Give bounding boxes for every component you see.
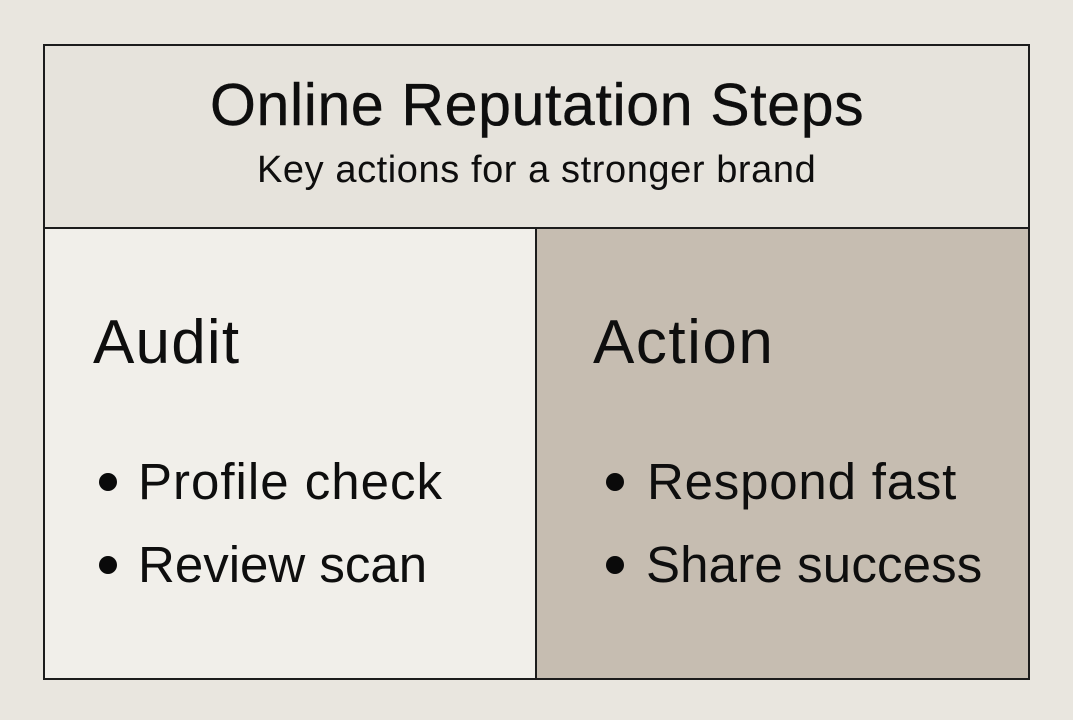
bullet: review scan: Review scan [138,536,427,593]
heading: action: Action [593,308,774,377]
panel: action [536,229,1030,680]
title: Online Reputation Steps [210,72,864,138]
bullet: share success: Share success [646,536,982,593]
subtitle: Key actions for a stronger brand [257,149,816,191]
bullet: respond fast: Respond fast [647,453,957,510]
bullet: profile check: Profile check [138,453,443,510]
panel: audit [43,229,536,680]
heading: audit: Audit [93,308,240,377]
panel: header [43,44,1030,229]
